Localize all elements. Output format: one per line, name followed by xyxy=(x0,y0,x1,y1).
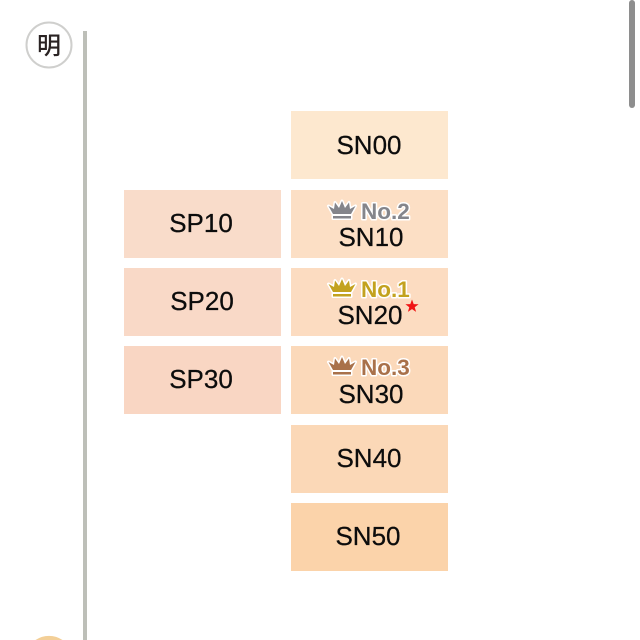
scrollbar xyxy=(629,0,635,108)
swatch: SN30 ranked No.3 xyxy=(291,346,448,414)
brightness scale line xyxy=(83,31,87,640)
swatch: SN10 ranked No.2: SN10 xyxy=(338,222,404,252)
column: SN shades xyxy=(291,111,448,571)
swatch: SN20 ranked No.1 xyxy=(291,268,448,336)
swatch: SN50: SN50 xyxy=(335,521,401,551)
icon: bright label circle xyxy=(26,22,72,68)
swatch: SP30 xyxy=(124,346,281,414)
icon: gold crown xyxy=(328,279,356,296)
rank: No.3: No.3 xyxy=(361,355,410,380)
swatch: SP10 xyxy=(124,190,281,258)
icon: silver crown xyxy=(328,201,356,218)
swatch: SN00: SN00 xyxy=(336,130,402,160)
swatch: SN20 ranked No.1: SN20 xyxy=(337,300,403,330)
rank: No.1: No.1 xyxy=(361,277,410,302)
swatch: SN40 xyxy=(291,425,448,493)
swatch: SN30 ranked No.3: SN30 xyxy=(338,379,404,409)
swatch: SN00 xyxy=(291,111,448,179)
swatch: SN40: SN40 xyxy=(336,443,402,473)
icon: dark end circle xyxy=(36,636,62,640)
swatch: SP20 xyxy=(124,268,281,336)
swatch: SP20: SP20 xyxy=(170,286,234,316)
swatch: SN50 xyxy=(291,503,448,571)
swatch: SP30: SP30 xyxy=(169,364,233,394)
icon: bright label circle: 明 xyxy=(37,33,61,60)
icon: bronze crown xyxy=(328,357,356,374)
rank: No.2: No.2 xyxy=(361,199,410,224)
swatch: SN10 ranked No.2 xyxy=(291,190,448,258)
icon: red star xyxy=(405,300,419,312)
column: SP shades xyxy=(124,190,281,414)
swatch: SP10: SP10 xyxy=(169,208,233,238)
